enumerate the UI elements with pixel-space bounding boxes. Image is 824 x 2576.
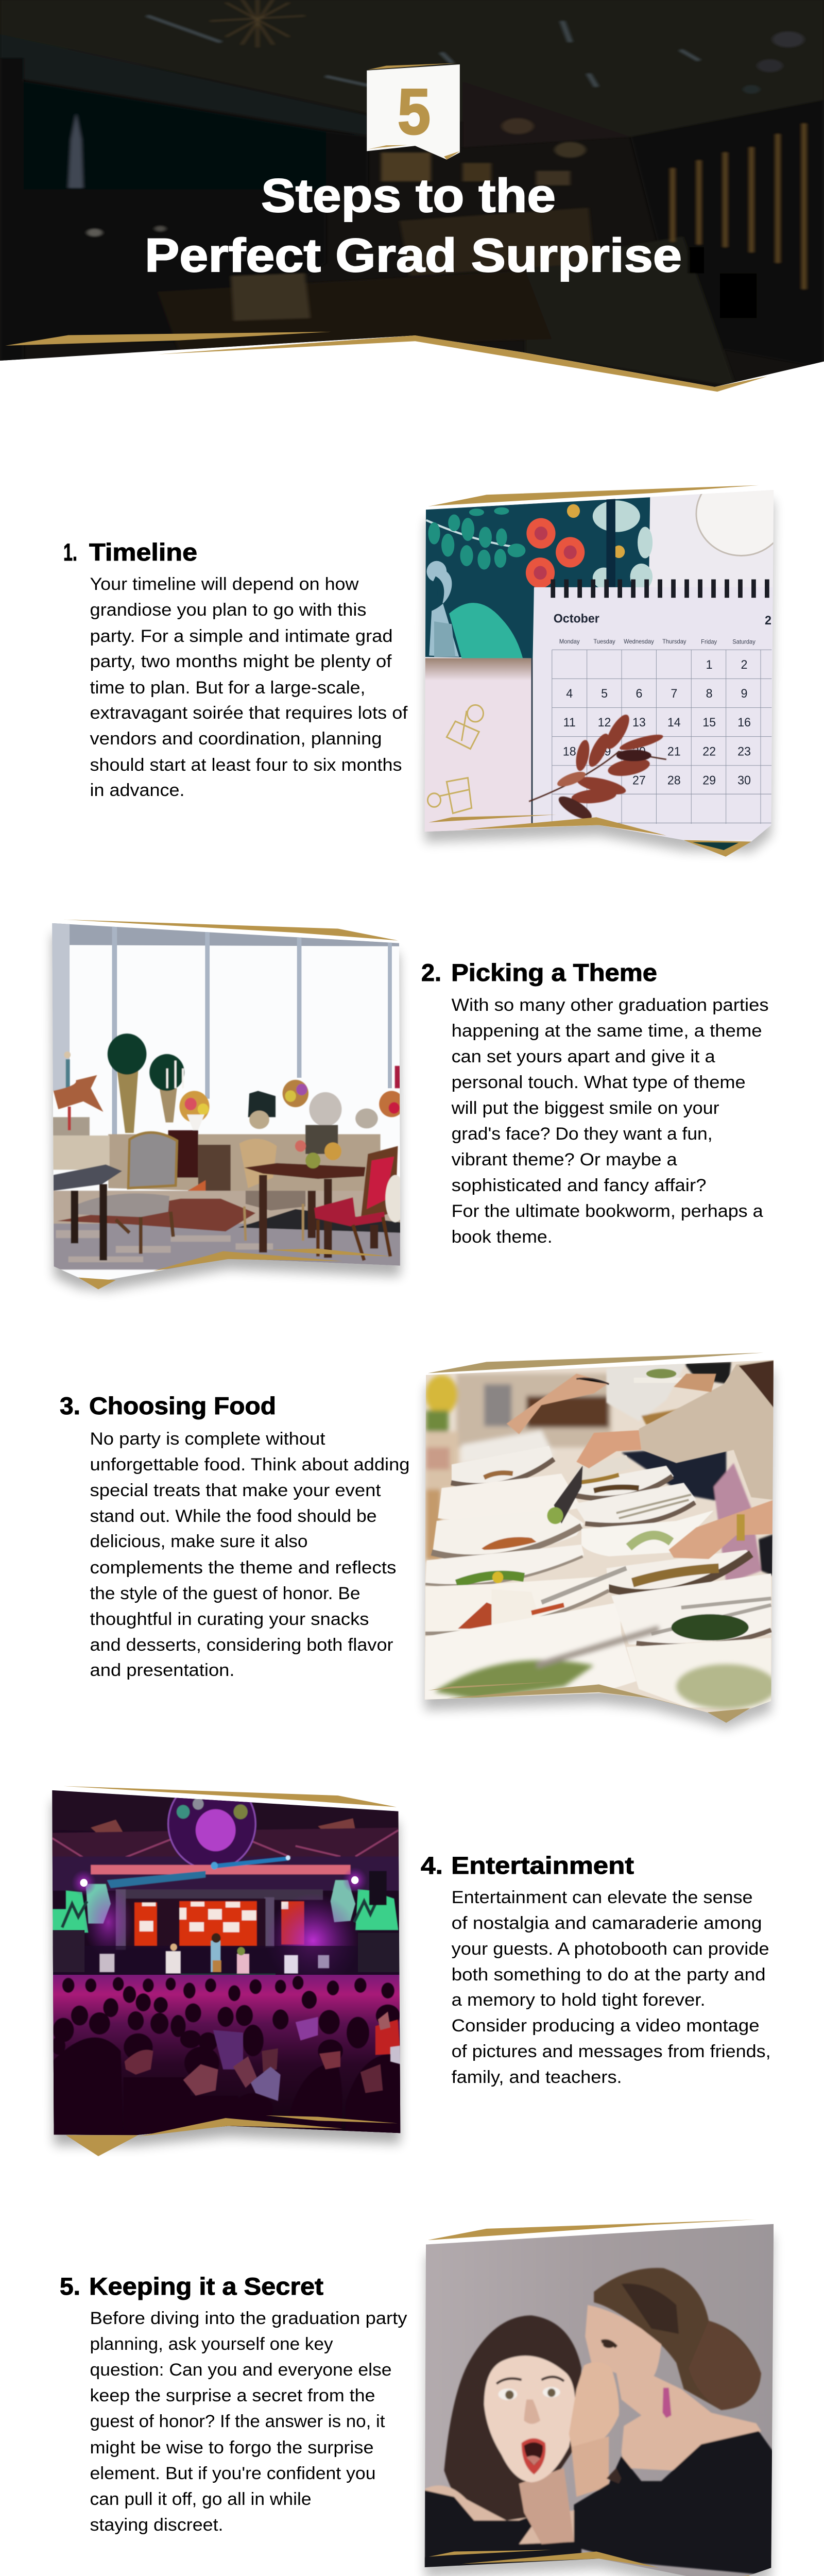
- panel: step 4 entertainment: [51, 1777, 771, 2156]
- step 3 photo: buffet: [422, 1353, 776, 1728]
- step 2 photo: themed furniture setup: [51, 920, 405, 1291]
- step 1 heading: Timeline: [89, 538, 197, 566]
- step 4 body text: of nostalgia and camaraderie among: [452, 1913, 762, 1933]
- step 1 photo: calendar: 5: [601, 687, 608, 701]
- step 1 body text: Your timeline will depend on how: [90, 574, 359, 594]
- step 1 photo: calendar: Thursday: [662, 639, 686, 645]
- step 1 body text: party, two months might be plenty of: [90, 652, 392, 671]
- step 5 body text: might be wise to forgo the surprise: [90, 2438, 374, 2458]
- step 4 body text: Consider producing a video montage: [452, 2016, 760, 2036]
- step 1 body text: grandiose you plan to go with this: [90, 600, 367, 620]
- step 3 body text: thoughtful in curating your snacks: [90, 1609, 369, 1629]
- step 5 body text: can pull it off, go all in while: [90, 2489, 311, 2509]
- panel: step 3 choosing food: [60, 1353, 776, 1728]
- number badge: 5: [398, 76, 431, 148]
- step 1 photo: calendar: 9: [741, 687, 747, 701]
- step 1 photo: calendar: 15: [702, 716, 716, 730]
- step 4 heading: 4.: [421, 1852, 443, 1879]
- title: [145, 170, 682, 282]
- step 5 body text: staying discreet.: [90, 2515, 224, 2535]
- step 1 photo: calendar: 19: [598, 744, 611, 758]
- step 4 photo: concert crowd: [51, 1777, 403, 2156]
- step 5 body text: guest of honor? If the answer is no, it: [90, 2412, 385, 2431]
- step 2 body text: For the ultimate bookworm, perhaps a: [452, 1201, 763, 1221]
- step 5 body text: element. But if you're confident you: [90, 2464, 376, 2483]
- step 1 photo: calendar: October: [554, 612, 599, 626]
- step 1 photo: calendar: 11: [563, 716, 576, 730]
- step 1 photo: calendar: Friday: [701, 639, 717, 646]
- step 1 body text: in advance.: [90, 781, 184, 800]
- step 1 photo: calendar: Saturday: [732, 639, 756, 646]
- header gold edge accents: [5, 332, 767, 392]
- step 2 body text: sophisticated and fancy affair?: [452, 1176, 707, 1195]
- step 4 body text: both something to do at the party and: [452, 1965, 766, 1985]
- step 5 photo: women whispering: [422, 2219, 776, 2576]
- step 3 body text: delicious, make sure it also: [90, 1532, 308, 1551]
- title: Steps to the: [261, 170, 556, 222]
- step 2 body text: personal touch. What type of theme: [452, 1073, 746, 1092]
- step 1 photo: calendar: 7: [671, 687, 677, 701]
- step 5 body text: [90, 2309, 407, 2535]
- step 1 photo: calendar: 16: [737, 716, 751, 730]
- step 2 body text: [451, 995, 769, 1247]
- step 1 photo: calendar: 13: [632, 716, 646, 730]
- step 1 body text: extravagant soirée that requires lots of: [90, 703, 408, 723]
- step 3 body text: special treats that make your event: [90, 1481, 381, 1500]
- panel: step 1 timeline: [63, 471, 786, 857]
- header: photo banner with title: [0, 0, 824, 394]
- step 1 photo: calendar: 12: [598, 716, 611, 730]
- step 4 heading: Entertainment: [451, 1852, 634, 1879]
- step 2 body text: can set yours apart and give it a: [452, 1047, 715, 1066]
- panel: step 5 keeping it a secret: [60, 2219, 776, 2576]
- step 5 body text: question: Can you and everyone else: [90, 2360, 391, 2380]
- step 1 photo: calendar: 23: [737, 744, 751, 758]
- step 4 body text: family, and teachers.: [452, 2067, 622, 2087]
- step 1 photo: calendar: 21: [667, 744, 681, 758]
- step 4 body text: your guests. A photobooth can provide: [452, 1939, 769, 1959]
- step 3 body text: the style of the guest of honor. Be: [90, 1584, 360, 1603]
- step 5 heading: 5.: [60, 2273, 80, 2300]
- step 1 body text: [90, 574, 408, 800]
- step 1 photo: calendar: 30: [737, 773, 751, 788]
- header background photo: night venue: [0, 0, 824, 394]
- step 1 photo: calendar: 2: [765, 614, 771, 628]
- title: Perfect Grad Surprise: [145, 229, 682, 282]
- step 1 body text: vendors and coordination, planning: [90, 729, 382, 749]
- step 1 photo: calendar: 2: [741, 657, 747, 672]
- step 2 body text: With so many other graduation parties: [452, 995, 769, 1015]
- number badge: [367, 63, 460, 160]
- step 5 body text: keep the surprise a secret from the: [90, 2386, 375, 2405]
- step 2 heading: 2.: [421, 959, 441, 986]
- step 1 photo: calendar: 1: [706, 657, 713, 672]
- step 3 body text: unforgettable food. Think about adding: [90, 1455, 410, 1475]
- step 3 heading: 3.: [60, 1392, 80, 1419]
- step 3 body text: No party is complete without: [90, 1429, 325, 1449]
- step 1 photo: calendar: 8: [706, 687, 713, 701]
- step 5 body text: planning, ask yourself one key: [90, 2334, 333, 2354]
- step 2 body text: vibrant theme? Or maybe a: [452, 1150, 677, 1170]
- step 1 photo: calendar: [422, 471, 786, 857]
- step 4 body text: of pictures and messages from friends,: [452, 2042, 771, 2061]
- step 1 photo: calendar: 14: [667, 716, 681, 730]
- step 4 body text: [452, 1888, 771, 2087]
- step 3 body text: and desserts, considering both flavor: [90, 1635, 393, 1655]
- step 1 photo: calendar: Monday: [559, 639, 580, 645]
- step 1 photo: calendar: Tuesday: [593, 639, 615, 645]
- step 1 body text: should start at least four to six months: [90, 755, 402, 775]
- panel: step 2 picking a theme: [51, 920, 769, 1291]
- step 1 body text: time to plan. But for a large-scale,: [90, 678, 366, 698]
- step 1 photo: calendar: 27: [632, 773, 646, 788]
- step 5 body text: Before diving into the graduation party: [90, 2309, 407, 2328]
- step 1 photo: calendar: 20: [632, 744, 646, 758]
- step 1 photo: calendar: 6: [636, 687, 642, 701]
- step 2 body text: will put the biggest smile on your: [451, 1098, 719, 1118]
- step 1 photo: calendar: 28: [667, 773, 681, 788]
- step 3 body text: [90, 1429, 410, 1680]
- step 2 body text: grad's face? Do they want a fun,: [452, 1124, 713, 1144]
- step 3 heading: Choosing Food: [89, 1392, 276, 1419]
- step 1 body text: party. For a simple and intimate grad: [90, 626, 392, 646]
- step 1 photo: calendar: Wednesday: [624, 639, 654, 645]
- step 1 photo: calendar: 18: [563, 744, 576, 758]
- step 3 body text: complements the theme and reflects: [90, 1558, 397, 1578]
- step 2 body text: book theme.: [452, 1227, 553, 1247]
- step 3 body text: stand out. While the food should be: [90, 1506, 376, 1526]
- step 4 body text: Entertainment can elevate the sense: [452, 1888, 753, 1907]
- step 1 photo: calendar: 29: [702, 773, 716, 788]
- step 1 photo: calendar: 22: [702, 744, 716, 758]
- step 2 body text: happening at the same time, a theme: [452, 1021, 762, 1041]
- step 2 heading: Picking a Theme: [451, 959, 657, 986]
- step 1 photo: calendar: 4: [566, 687, 573, 701]
- step 5 heading: Keeping it a Secret: [89, 2273, 323, 2300]
- step 1 heading: 1.: [63, 538, 77, 566]
- step 4 body text: a memory to hold tight forever.: [452, 1990, 706, 2010]
- step 3 body text: and presentation.: [90, 1660, 235, 1680]
